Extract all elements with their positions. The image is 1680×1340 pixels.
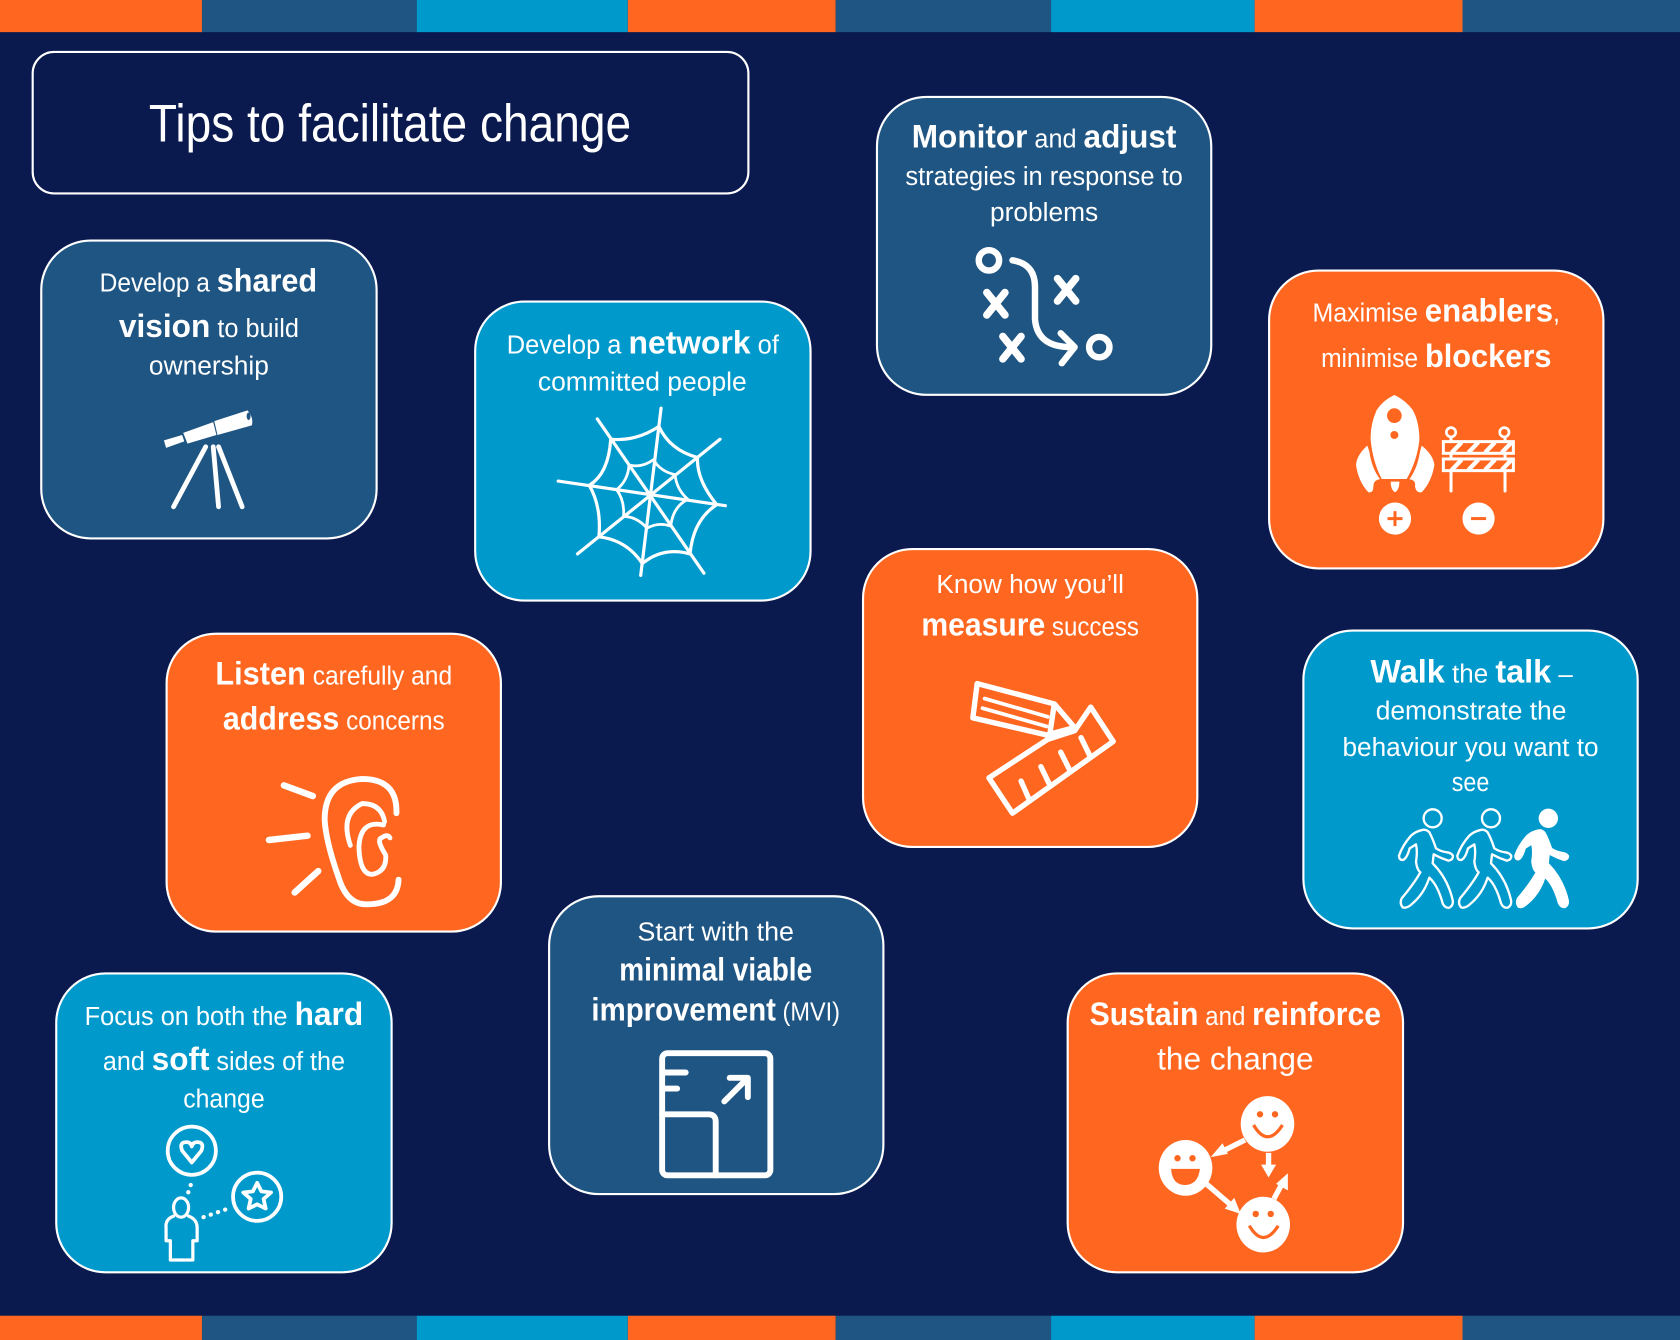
text: listen <box>215 656 452 737</box>
icon: barrier <box>1443 428 1513 491</box>
text: monitor and adjust: Monitor and adjust <box>912 118 1177 154</box>
icon: smiley top <box>1241 1096 1294 1152</box>
icon: star bubble <box>233 1173 281 1221</box>
icon: pencil and ruler <box>973 684 1113 813</box>
text: measure success: measure success <box>921 606 1139 642</box>
icon: plus <box>1379 502 1411 535</box>
top colour strip <box>0 0 1680 32</box>
text: enablers and blockers: Maximise enablers, <box>1312 292 1560 328</box>
text: listen: address concerns <box>223 701 445 737</box>
title box: Tips to facilitate change <box>149 94 631 153</box>
text: measure success <box>921 571 1139 642</box>
text: hard and soft: Focus on both the hard <box>85 996 363 1032</box>
icon: outlined walker two <box>1457 809 1511 908</box>
text: minimal viable improvement <box>591 919 840 1028</box>
text: walk the talk: behaviour you want to <box>1342 734 1599 762</box>
panel: hard and soft <box>56 973 392 1272</box>
icon: smiley left <box>1159 1140 1212 1196</box>
text: monitor and adjust <box>905 118 1183 227</box>
arrows between smileys <box>1206 1140 1288 1214</box>
icon: minus <box>1462 502 1495 535</box>
icon: telescope <box>164 410 252 507</box>
icon: strategy play <box>979 250 1109 363</box>
text: sustain and reinforce <box>1090 996 1381 1076</box>
panel: minimal viable improvement <box>549 896 883 1194</box>
panel: measure success <box>863 549 1197 847</box>
panel: walk the talk <box>1303 631 1638 928</box>
text: listen: Listen carefully and <box>215 656 452 692</box>
icon: smiley bottom <box>1236 1197 1290 1252</box>
text: sustain and reinforce: Sustain and reinforce <box>1090 996 1381 1032</box>
bottom colour strip <box>0 1316 1680 1340</box>
text: network <box>507 325 780 397</box>
text: walk the talk <box>1342 653 1599 797</box>
text: network: Develop a network of <box>507 325 780 361</box>
text: minimal viable improvement: improvement (MVI) <box>591 992 840 1028</box>
text: sustain and reinforce: the change <box>1157 1041 1314 1076</box>
icon: person with dotted links <box>166 1185 228 1260</box>
text: minimal viable improvement: Start with the <box>638 919 794 947</box>
icon: solid walker <box>1515 809 1569 908</box>
text: walk the talk: demonstrate the <box>1376 697 1566 725</box>
text: shared vision: vision to build <box>119 308 299 344</box>
text: shared vision <box>100 262 317 380</box>
text: monitor and adjust: strategies in response to <box>905 163 1183 191</box>
text: enablers and blockers <box>1312 292 1560 374</box>
title box <box>33 52 748 193</box>
panel: enablers and blockers <box>1269 271 1603 568</box>
text: hard and soft: and soft sides of the <box>103 1041 345 1077</box>
text: shared vision: ownership <box>149 352 269 380</box>
panel: listen <box>167 634 501 932</box>
text: hard and soft <box>85 996 363 1113</box>
panel: shared vision <box>41 241 377 538</box>
text: network: committed people <box>538 369 747 397</box>
text: walk the talk: see <box>1452 769 1489 797</box>
icon: spider web <box>558 408 725 575</box>
panel: sustain and reinforce <box>1068 973 1403 1272</box>
icon: rocket <box>1356 395 1434 492</box>
text: hard and soft: change <box>183 1085 265 1113</box>
text: minimal viable improvement: minimal viable <box>619 951 812 987</box>
icon: ear <box>269 779 399 904</box>
icon: heart bubble <box>168 1127 216 1175</box>
icon: outlined walker one <box>1399 809 1453 908</box>
text: walk the talk: Walk the talk – <box>1370 653 1574 689</box>
text: enablers and blockers: minimise blockers <box>1321 338 1551 374</box>
text: shared vision: Develop a shared <box>100 262 317 298</box>
icon: scale up square <box>662 1053 770 1175</box>
panel: network <box>475 302 811 601</box>
text: measure success: Know how you’ll <box>936 571 1124 599</box>
panel: monitor and adjust <box>877 97 1211 395</box>
text: monitor and adjust: problems <box>990 199 1098 227</box>
